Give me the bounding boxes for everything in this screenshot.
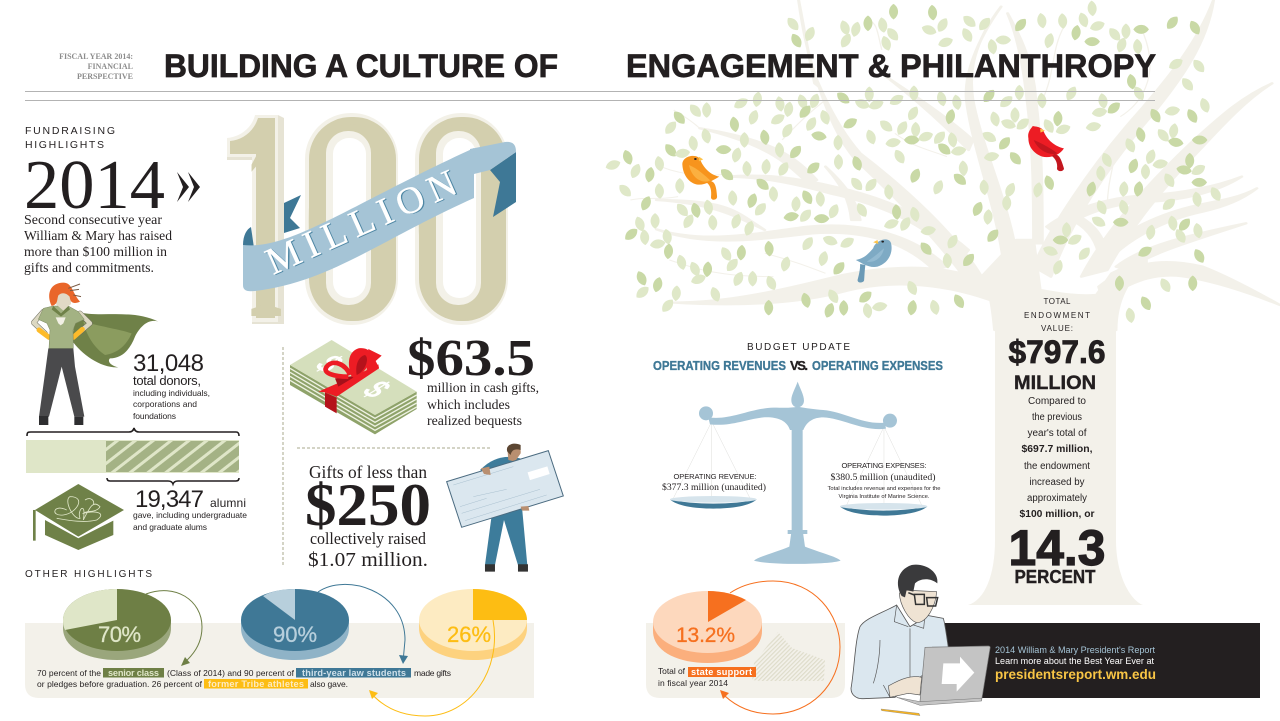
text: total endowment value: $697.7 million, [1022, 444, 1093, 455]
text: total endowment value: MILLION [1014, 373, 1096, 394]
blue bird [856, 239, 892, 283]
panel: other highlights band [25, 623, 534, 698]
title: revenues vs expenses: VS. [790, 358, 808, 373]
text: 31,048 donors: 31,048 [133, 350, 204, 377]
text: other highlights caption [37, 668, 451, 689]
header rules [25, 92, 1155, 100]
donors bracket [27, 428, 239, 436]
text: total endowment value: $100 million, or [1020, 509, 1095, 520]
year 2014: 2014 [24, 147, 165, 224]
text: total endowment value: TOTAL [1044, 297, 1071, 306]
text: other highlights caption: senior class [108, 668, 159, 678]
text: second consecutive year: William & Mary has raised [24, 229, 172, 244]
pencil [881, 709, 920, 716]
text: 31,048 donors: total donors, [133, 373, 201, 388]
map: virginia hatch [752, 632, 825, 681]
text: $63.5 cash gifts: million in cash gifts, [427, 380, 539, 395]
text: 31,048 donors: foundations [133, 411, 176, 421]
pie chart: 90 percent: 90% [273, 622, 317, 647]
text: total endowment value: ENDOWMENT [1024, 311, 1090, 320]
section label: fiscal year: PERSPECTIVE [77, 72, 133, 81]
heading: fundraising highlights: FUNDRAISING [25, 125, 115, 137]
text: state support caption [658, 666, 756, 688]
text: $63.5 cash gifts: which includes [427, 397, 510, 412]
text: other highlights caption: 70 percent of the [37, 668, 101, 678]
icon: stack of money with red bow: $ [306, 350, 353, 378]
text: second consecutive year: Second consecutive year [24, 213, 162, 228]
text: total endowment value: year's total of [1028, 428, 1087, 439]
text: second consecutive year: gifts and commitments. [24, 261, 154, 276]
text: 19,347 alumni: and graduate alums [133, 522, 207, 532]
text: gifts of less than $250: $250 [305, 472, 431, 538]
banner: president's report [945, 623, 1260, 698]
text: total endowment value: the previous [1032, 412, 1082, 423]
man at laptop [851, 565, 990, 716]
ribbon [243, 142, 516, 291]
tree illustration [604, 0, 1280, 605]
text: 31,048 donors [133, 350, 210, 421]
banner: president's report: presidentsreport.wm.edu [995, 666, 1156, 682]
text: state support caption: state support [691, 667, 752, 677]
donors proportion bar [26, 440, 239, 473]
text: operating revenue: $377.3 million (unaudited) [662, 482, 766, 492]
title: ENGAGEMENT & PHILANTHROPY [626, 48, 1156, 84]
text: operating revenue [662, 472, 766, 492]
pie chart: 70 percent: 70% [98, 622, 141, 647]
text: 19,347 alumni: 19,347 [135, 486, 204, 513]
text: 31,048 donors: including individuals, [133, 388, 210, 398]
text: gifts of less than $250: Gifts of less than [309, 462, 427, 482]
pie chart: 13.2 percent [653, 591, 762, 663]
title [164, 48, 1156, 84]
numerals 100: 0 [411, 60, 513, 381]
heading: other highlights: OTHER HIGHLIGHTS [25, 569, 152, 580]
arrow: olive [146, 591, 202, 666]
red cardinal [1028, 126, 1064, 171]
hero figure with cape [34, 283, 158, 425]
tree leaves [604, 0, 1224, 324]
text: total endowment value: PERCENT [1014, 567, 1096, 587]
text: operating expenses: Total includes revenue and expenses for the [828, 486, 941, 492]
text: operating expenses: OPERATING EXPENSES: [842, 461, 926, 470]
banner: president's report: Learn more about the Best Year Ever at [995, 656, 1154, 667]
birds [682, 126, 1064, 283]
panel: state support band [646, 623, 845, 698]
text: other highlights caption: (Class of 2014) and 90 percent of [167, 668, 295, 678]
text: total endowment value: $797.6 [1008, 334, 1106, 370]
section label: fiscal year: FINANCIAL [88, 62, 133, 71]
text: total endowment value [1008, 297, 1106, 587]
ribbon text: MILLION [260, 162, 463, 283]
text: 19,347 alumni: gave, including undergraduate [133, 510, 247, 520]
numerals 100 [227, 60, 513, 381]
text: gifts of less than $250: $1.07 million. [308, 549, 428, 571]
divider: horizontal [297, 447, 492, 449]
text: 31,048 donors: corporations and [133, 399, 197, 409]
text: $63.5 cash gifts: $63.5 [407, 330, 535, 387]
title: revenues vs expenses: OPERATING REVENUES [653, 358, 786, 373]
text: gifts of less than $250 [305, 462, 431, 571]
icon: stack of money with red bow: $ [353, 375, 400, 403]
pie chart: 26 percent [419, 589, 527, 660]
text: other highlights caption: former Tribe athletes [208, 679, 304, 689]
text: total endowment value: the endowment [1024, 461, 1090, 472]
text: total endowment value: approximately [1027, 493, 1087, 504]
text: total endowment value: VALUE: [1041, 324, 1073, 333]
alumni bracket [107, 478, 239, 484]
banner: president's report: 2014 William & Mary President's Report [995, 645, 1155, 656]
numerals 100: 1 [244, 71, 286, 375]
divider: vertical [282, 347, 284, 567]
heading: fundraising highlights: HIGHLIGHTS [25, 139, 104, 151]
text: total endowment value: increased by [1030, 477, 1084, 488]
pie chart: 70 percent [63, 589, 171, 660]
text: operating expenses [828, 461, 941, 500]
icon: graduation cap [33, 484, 124, 550]
text: total endowment value: Compared to [1028, 396, 1086, 407]
ribbon text: MILLION [261, 162, 465, 284]
tree trunk [968, 325, 1143, 605]
text: $63.5 cash gifts [407, 330, 539, 428]
pie chart: 26 percent: 26% [447, 622, 491, 647]
title: revenues vs expenses [653, 358, 943, 373]
text: 19,347 alumni [133, 486, 247, 532]
title: BUILDING A CULTURE OF [164, 48, 558, 84]
tree branches [630, 0, 1280, 330]
text: state support caption: in fiscal year 2014 [658, 678, 728, 688]
pie chart: 90 percent [241, 589, 349, 660]
heading: budget update: BUDGET UPDATE [747, 342, 850, 353]
balance scale [670, 382, 927, 564]
text: other highlights caption: also gave. [310, 679, 348, 689]
text: other highlights caption: or pledges before graduation. 26 percent of [37, 679, 203, 689]
arrow: orange [720, 581, 840, 714]
text: gifts of less than $250: collectively raised [310, 529, 427, 548]
arrow: yellow [369, 620, 495, 716]
arrow: blue [318, 584, 408, 664]
big 100 million [227, 60, 516, 381]
text: operating revenue: OPERATING REVENUE: [674, 472, 756, 481]
text: operating expenses: $380.5 million (unaudited) [830, 472, 936, 482]
text: $63.5 cash gifts: realized bequests [427, 413, 522, 428]
section label: fiscal year [59, 52, 133, 81]
text: other highlights caption: third-year law students [302, 668, 406, 678]
text: 19,347 alumni: alumni [210, 496, 246, 510]
heading: fundraising highlights [25, 125, 115, 151]
text: operating expenses: Virginia Institute of Marine Science. [838, 494, 930, 500]
man holding oversized check [447, 444, 563, 572]
text: total endowment value: 14.3 [1008, 520, 1106, 576]
cape [72, 312, 158, 367]
numerals 100: 0 [301, 60, 403, 381]
section label: fiscal year: FISCAL YEAR 2014: [59, 52, 133, 61]
icon: stack of money with red bow [290, 340, 417, 434]
text: other highlights caption: made gifts [414, 668, 451, 678]
text: second consecutive year: more than $100 million in [24, 245, 167, 260]
title: revenues vs expenses: OPERATING EXPENSES [812, 358, 943, 373]
text: state support caption: Total of [658, 666, 686, 676]
text: second consecutive year [24, 213, 172, 276]
orange bird [682, 156, 719, 200]
pie chart: 13.2 percent: 13.2% [676, 624, 735, 647]
icon: double chevron [177, 172, 200, 202]
